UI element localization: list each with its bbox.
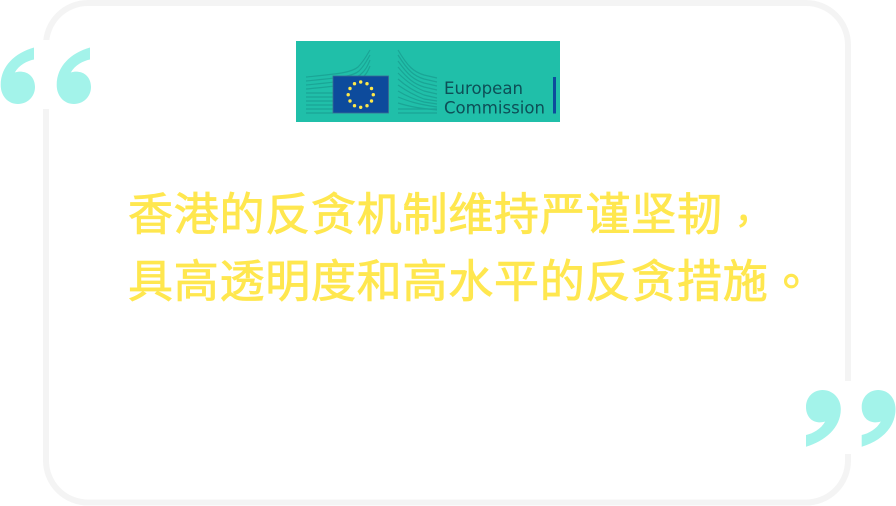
quote line 2: 具高透明度和高水平的反贪措施 。 [128, 244, 828, 307]
logo blue bar [553, 77, 556, 114]
quote line 1: 香港的反贪机制维持严谨坚韧 ， [128, 189, 772, 240]
icon: opening quotation marks [0, 48, 91, 104]
icon: right building lines [398, 50, 437, 113]
quote text [128, 189, 828, 307]
icon: closing quotation marks [806, 390, 896, 447]
logo: European Commission [296, 41, 560, 122]
logo wordmark: European [444, 79, 523, 99]
logo wordmark: Commission [444, 99, 545, 119]
logo wordmark [444, 79, 545, 119]
icon: EU flag [333, 76, 388, 113]
icon: left building lines [306, 50, 370, 113]
